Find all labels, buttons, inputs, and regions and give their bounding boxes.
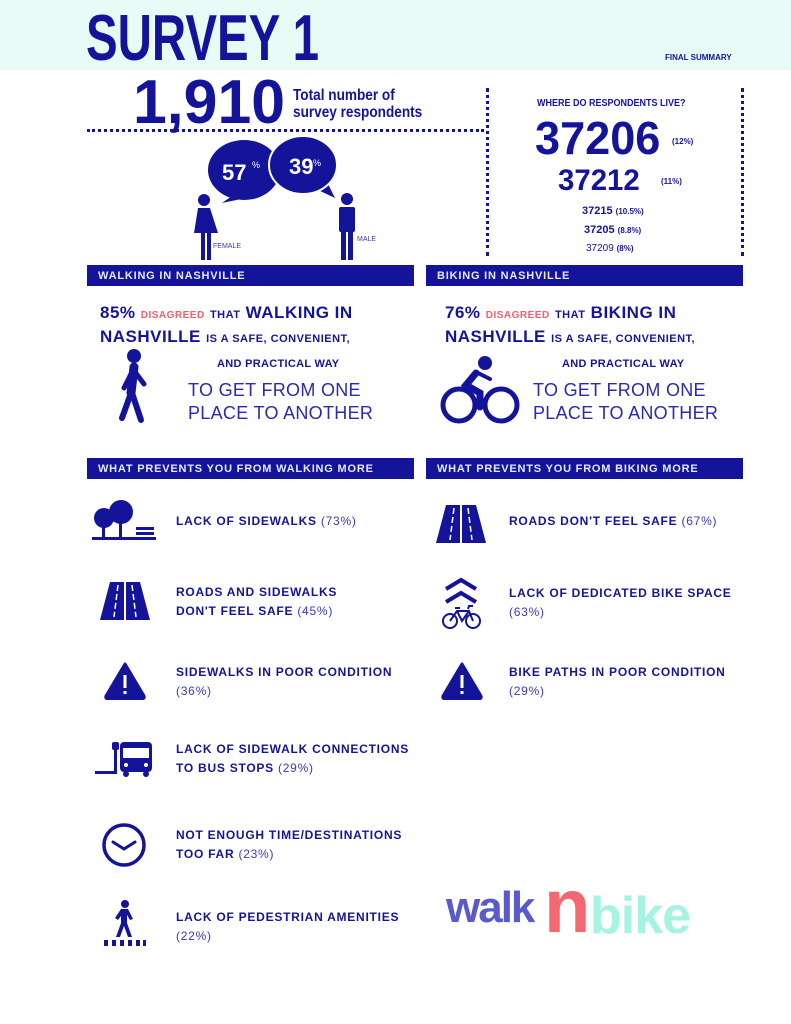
bubble: male: [269, 136, 337, 198]
bubble: female: [208, 140, 280, 203]
icon: cyclist: [440, 356, 520, 424]
walking statement: PLACE TO ANOTHER: [188, 403, 373, 423]
item: bus stop connections: [176, 742, 409, 775]
walking statement: 85% DISAGREED THAT WALKING IN: [100, 303, 353, 322]
item: lack of sidewalks: LACK OF SIDEWALKS (73%): [176, 514, 357, 528]
logo: walk n bike: [446, 864, 690, 949]
zip codes: 37215 (10.5%): [582, 205, 644, 217]
zip codes: 37209 (8%): [586, 243, 633, 254]
logo: walk n bike: bike: [590, 887, 690, 945]
walking statement: [100, 303, 373, 423]
icon: bike lane chevrons: [442, 578, 481, 629]
biking statement: TO GET FROM ONE: [533, 380, 706, 400]
bar: what prevents biking: [426, 458, 743, 479]
header band: [0, 0, 791, 70]
respondents total: [133, 68, 422, 137]
icon: warning (bike): [441, 662, 483, 700]
item: lack of bike space: (63%): [509, 605, 545, 619]
walking statement: NASHVILLE IS A SAFE, CONVENIENT,: [100, 327, 350, 346]
item: bike paths poor condition: BIKE PATHS IN POOR CONDITION: [509, 665, 726, 679]
item: bike paths poor condition: [509, 665, 726, 698]
icon: clock: [102, 823, 146, 867]
icon: female: [194, 194, 218, 260]
item: bus stop connections: LACK OF SIDEWALK CONNECTIONS: [176, 742, 409, 756]
zip codes: 37205 (8.8%): [584, 224, 641, 236]
item: pedestrian amenities: LACK OF PEDESTRIAN AMENITIES: [176, 910, 399, 924]
gender chart: MALE: [357, 236, 376, 243]
bar: what prevents biking: WHAT PREVENTS YOU FROM BIKING MORE: [437, 463, 698, 475]
gender chart: %: [313, 158, 321, 168]
walking statement: TO GET FROM ONE: [188, 380, 361, 400]
item: sidewalks poor condition: [176, 665, 392, 698]
biking statement: PLACE TO ANOTHER: [533, 403, 718, 423]
bar: biking in nashville: [426, 265, 743, 286]
item: roads and sidewalks: DON'T FEEL SAFE (45%): [176, 604, 333, 618]
icon: road (bike): [436, 505, 486, 543]
bar: what prevents walking: [87, 458, 414, 479]
biking statement: 76% DISAGREED THAT BIKING IN: [445, 303, 676, 322]
item: roads and sidewalks: ROADS AND SIDEWALKS: [176, 585, 337, 599]
zip codes: WHERE DO RESPONDENTS LIVE?: [537, 98, 686, 109]
biking statement: AND PRACTICAL WAY: [562, 358, 684, 370]
bar: biking in nashville: BIKING IN NASHVILLE: [437, 270, 570, 282]
final summary label: FINAL SUMMARY: [665, 53, 732, 62]
respondents total: 1,910: [133, 68, 285, 137]
title: SURVEY 1: [86, 1, 319, 74]
icon: pedestrian crossing: [104, 900, 146, 946]
zip codes: (12%): [672, 137, 693, 146]
item: pedestrian amenities: (22%): [176, 929, 212, 943]
icon: bus stop: [95, 742, 152, 777]
item: sidewalks poor condition: (36%): [176, 684, 212, 698]
item: roads and sidewalks: [176, 585, 337, 618]
item: pedestrian amenities: [176, 910, 399, 943]
logo: walk n bike: n: [544, 864, 590, 949]
item: lack of bike space: LACK OF DEDICATED BIKE SPACE: [509, 586, 732, 600]
gender chart: 57: [222, 160, 246, 185]
gender chart: [194, 137, 376, 260]
respondents total: survey respondents: [293, 104, 422, 121]
icon: warning: [104, 662, 146, 700]
zip codes: 37206: [535, 112, 660, 164]
item: lack of bike space: [509, 586, 732, 619]
walking statement: AND PRACTICAL WAY: [217, 358, 339, 370]
bar: what prevents walking: WHAT PREVENTS YOU FROM WALKING MORE: [98, 463, 374, 475]
bar: walking in nashville: WALKING IN NASHVILLE: [98, 270, 245, 282]
item: roads don't feel safe: ROADS DON'T FEEL SAFE (67%): [509, 514, 717, 528]
item: time: [176, 828, 402, 861]
gender chart: FEMALE: [213, 243, 241, 250]
item: bike paths poor condition: (29%): [509, 684, 545, 698]
zip codes: 37212: [558, 164, 640, 197]
respondents total: Total number of: [293, 87, 395, 104]
item: time: NOT ENOUGH TIME/DESTINATIONS: [176, 828, 402, 842]
item: sidewalks poor condition: SIDEWALKS IN POOR CONDITION: [176, 665, 392, 679]
zip codes: [535, 98, 693, 254]
icon: trees and bench: [92, 500, 156, 540]
icon: road: [100, 582, 150, 620]
zip codes: (11%): [661, 177, 682, 186]
logo: walk n bike: walk: [446, 883, 533, 932]
gender chart: %: [252, 160, 260, 170]
item: time: TOO FAR (23%): [176, 847, 274, 861]
icon: walker: [119, 349, 146, 423]
item: bus stop connections: TO BUS STOPS (29%): [176, 761, 314, 775]
biking statement: NASHVILLE IS A SAFE, CONVENIENT,: [445, 327, 695, 346]
biking statement: [445, 303, 718, 423]
icon: male: [339, 193, 355, 260]
bar: walking in nashville: [87, 265, 414, 286]
gender chart: 39: [289, 154, 313, 179]
